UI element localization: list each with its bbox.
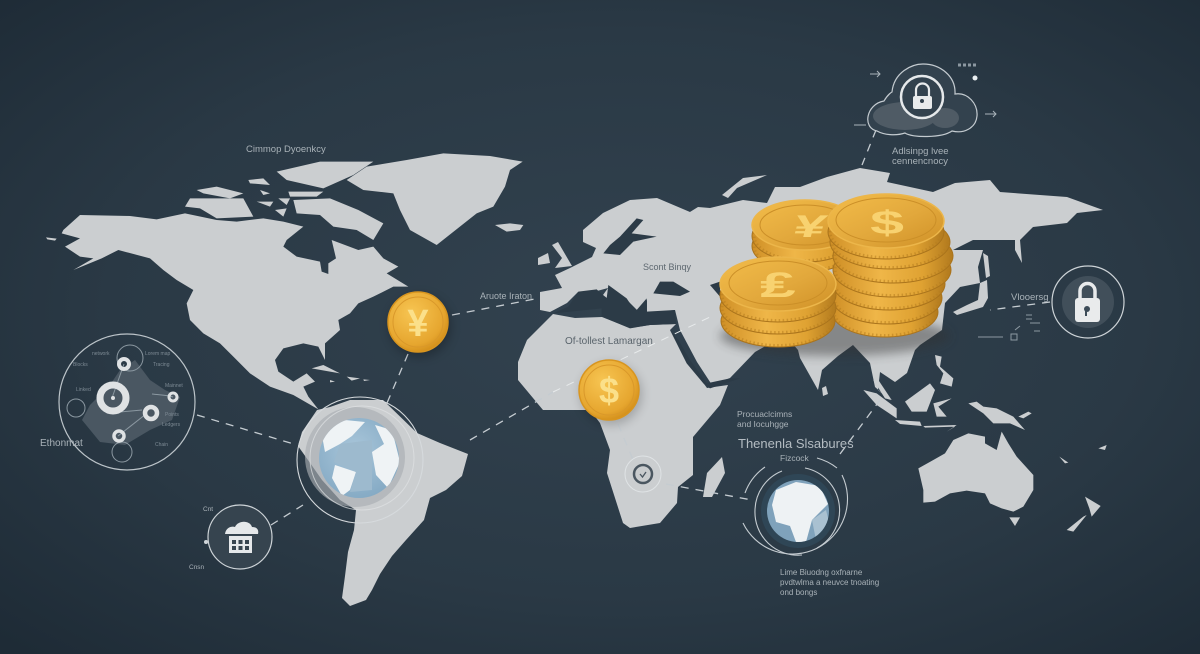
Caspian [710,282,720,297]
network diagram left: network [92,351,110,357]
Sakhalin and Japan [953,253,990,315]
coin: yen [388,292,451,357]
network diagram left: Lorem map [145,351,171,357]
coin: dollar: $ [599,370,619,411]
network diagram left: Mainnet [165,383,183,389]
Red Sea [670,330,740,388]
network diagram left: Chain [155,442,168,448]
world map [46,153,1107,606]
Australia [918,432,1033,512]
network diagram left: Linked [76,387,91,393]
stack shadow [720,316,950,356]
South America [298,400,468,606]
United Kingdom [552,242,572,268]
cloud calculator icon [204,505,272,569]
Baltic [603,218,657,255]
heading: transnational structures: Thenenla Slsabures [738,436,854,451]
cloud lock icon [854,64,996,137]
label: products line one: Procuaclcimns [737,409,792,419]
Africa [518,314,728,528]
label: currency discovery: Cimmop Dyoenkcy [246,144,326,155]
label: cloud short: Cnt [203,506,213,513]
coin: dollar [579,360,642,425]
labels [40,144,1048,597]
Madagascar [703,457,725,497]
stack: right dollar coins: $ [870,204,904,242]
label: Asia cryptocurrency second line: cennencnocy [892,156,948,167]
network diagram left: Blocks [73,362,88,368]
stack: front pound coins [720,257,836,347]
network diagram left: Tracing [153,362,170,368]
caption: globe line one: Lime Biuodng oxfnarne [780,568,863,577]
label: products line two: and Iocuhgge [737,419,789,429]
gold coin stacks [720,194,953,356]
Novaya Zemlya [722,175,767,198]
label: Atlantic route: Aruote Iraton [480,291,532,301]
North America and Arctic islands [46,153,523,409]
label: fizcock: Fizcock [780,453,810,463]
label: cloud bottom: Cnsn [189,564,205,571]
network diagram left [59,334,195,470]
stack: front pound coins: ₤ [760,265,796,305]
Black Sea [653,282,690,296]
small legend marks near padlock [978,315,1040,340]
label: Asia cryptocurrency: Adlsinpg lvee [892,146,949,157]
padlock icon right [1052,266,1124,338]
label: east Asia: Vlooersg [1011,292,1048,303]
network diagram left: Points [165,412,179,418]
connector lines [197,130,1050,525]
label: Europe: Scont Binqy [643,262,692,272]
New Zealand [1067,497,1101,532]
Mediterranean [553,285,676,328]
label: Africa language: Of-tollest Lamargan [565,336,653,347]
coin: yen: ¥ [407,303,429,345]
stack: right dollar coins [828,194,953,337]
inland seas [553,218,740,388]
Ireland [538,253,550,265]
label: environment: Ethonmat [40,438,83,449]
Tasmania [1009,517,1020,526]
Eurasia [540,168,1103,402]
network diagram left: Ledgers [162,422,181,428]
Sri Lanka [822,386,828,396]
small globe with arcs [743,458,848,555]
small target icon in Africa [625,456,661,492]
Southeast Asia and Oceania [863,350,1107,532]
stack: back yen coins [752,200,858,272]
caption: globe line two: pvdtwlma a neuvce tnoating [780,578,879,587]
caption: globe line three: ond bongs [780,588,817,597]
stack: back yen coins: ¥ [789,208,831,244]
globe over South America [297,397,423,523]
